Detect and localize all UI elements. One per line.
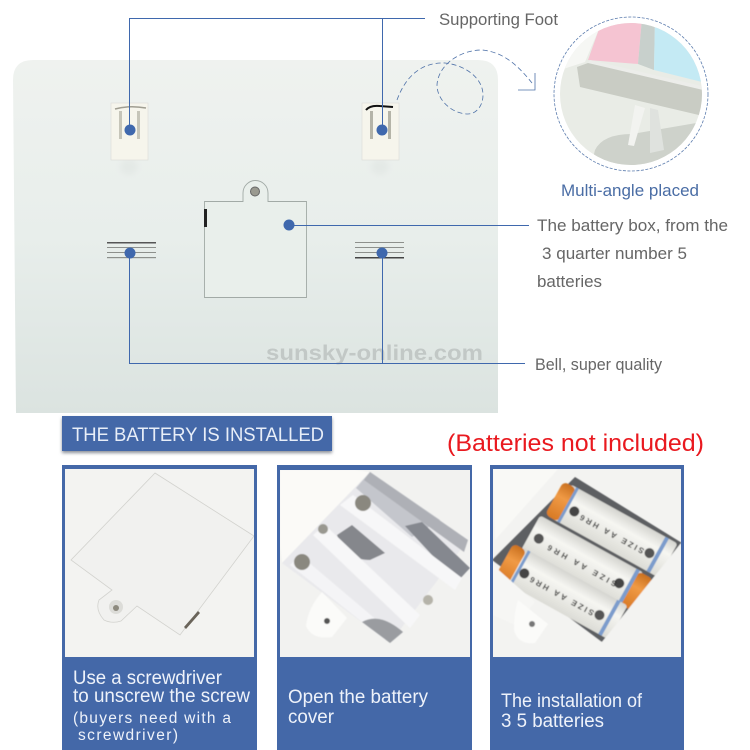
step 2 caption: Open the battery <box>288 687 428 708</box>
heading: battery installed: THE BATTERY IS INSTALLED <box>72 425 324 446</box>
step 3 caption <box>501 691 643 732</box>
step 2 caption: cover <box>288 707 335 728</box>
callout dot: left bell <box>124 248 136 258</box>
callout dot: right foot <box>376 124 388 136</box>
supporting foot right <box>362 103 399 175</box>
panel: step 2 <box>277 465 472 750</box>
supporting foot left <box>111 103 148 175</box>
callout dot: right bell <box>376 248 388 258</box>
label: battery box <box>537 216 728 291</box>
panel: device back <box>13 60 498 413</box>
note: batteries not included: (Batteries not included) <box>447 430 704 457</box>
callout lines: supporting foot <box>130 18 425 130</box>
callout line: bell <box>130 253 525 364</box>
battery top: SIZE AA HR6 <box>578 512 646 555</box>
step 2 caption <box>288 687 428 728</box>
callout dot: battery box <box>284 220 294 230</box>
heading: battery installed <box>62 416 332 453</box>
inset circle: multi-angle stand <box>554 15 710 171</box>
dashed arrow <box>397 50 535 114</box>
step 3 caption: The installation of <box>501 691 643 712</box>
label: battery box: 3 quarter number 5 <box>542 244 687 263</box>
step 1 caption: Use a screwdriver <box>73 668 223 689</box>
panel: step 1 <box>62 465 257 750</box>
battery bottom <box>495 543 628 640</box>
step 2 photo <box>280 470 470 657</box>
battery bottom: SIZE AA HR6 <box>528 574 596 617</box>
callout line: battery box <box>289 224 529 226</box>
step 1 caption: screwdriver) <box>78 727 178 744</box>
step 1 caption: (buyers need with a <box>73 710 231 727</box>
step 3 caption: 3 5 batteries <box>501 711 604 732</box>
speaker grille left <box>107 242 156 258</box>
label: battery box: batteries <box>537 272 602 291</box>
step 3 photo <box>492 469 682 657</box>
step 1 photo <box>65 469 254 657</box>
step 1 caption <box>73 668 250 744</box>
battery top <box>545 481 678 578</box>
callout dot: left foot <box>124 124 136 136</box>
watermark: sunsky-online.com <box>266 341 483 365</box>
label: bell: Bell, super quality <box>535 355 662 374</box>
label: battery box: The battery box, from the <box>537 216 728 235</box>
battery middle <box>521 515 654 613</box>
panel: step 3 <box>490 465 684 750</box>
speaker grille right <box>355 242 404 258</box>
battery cover <box>204 180 306 298</box>
battery middle: SIZE AA HR6 <box>545 542 618 588</box>
label: supporting foot: Supporting Foot <box>439 10 558 29</box>
label: multi-angle placed: Multi-angle placed <box>561 181 699 200</box>
step 1 caption: to unscrew the screw <box>73 686 250 707</box>
